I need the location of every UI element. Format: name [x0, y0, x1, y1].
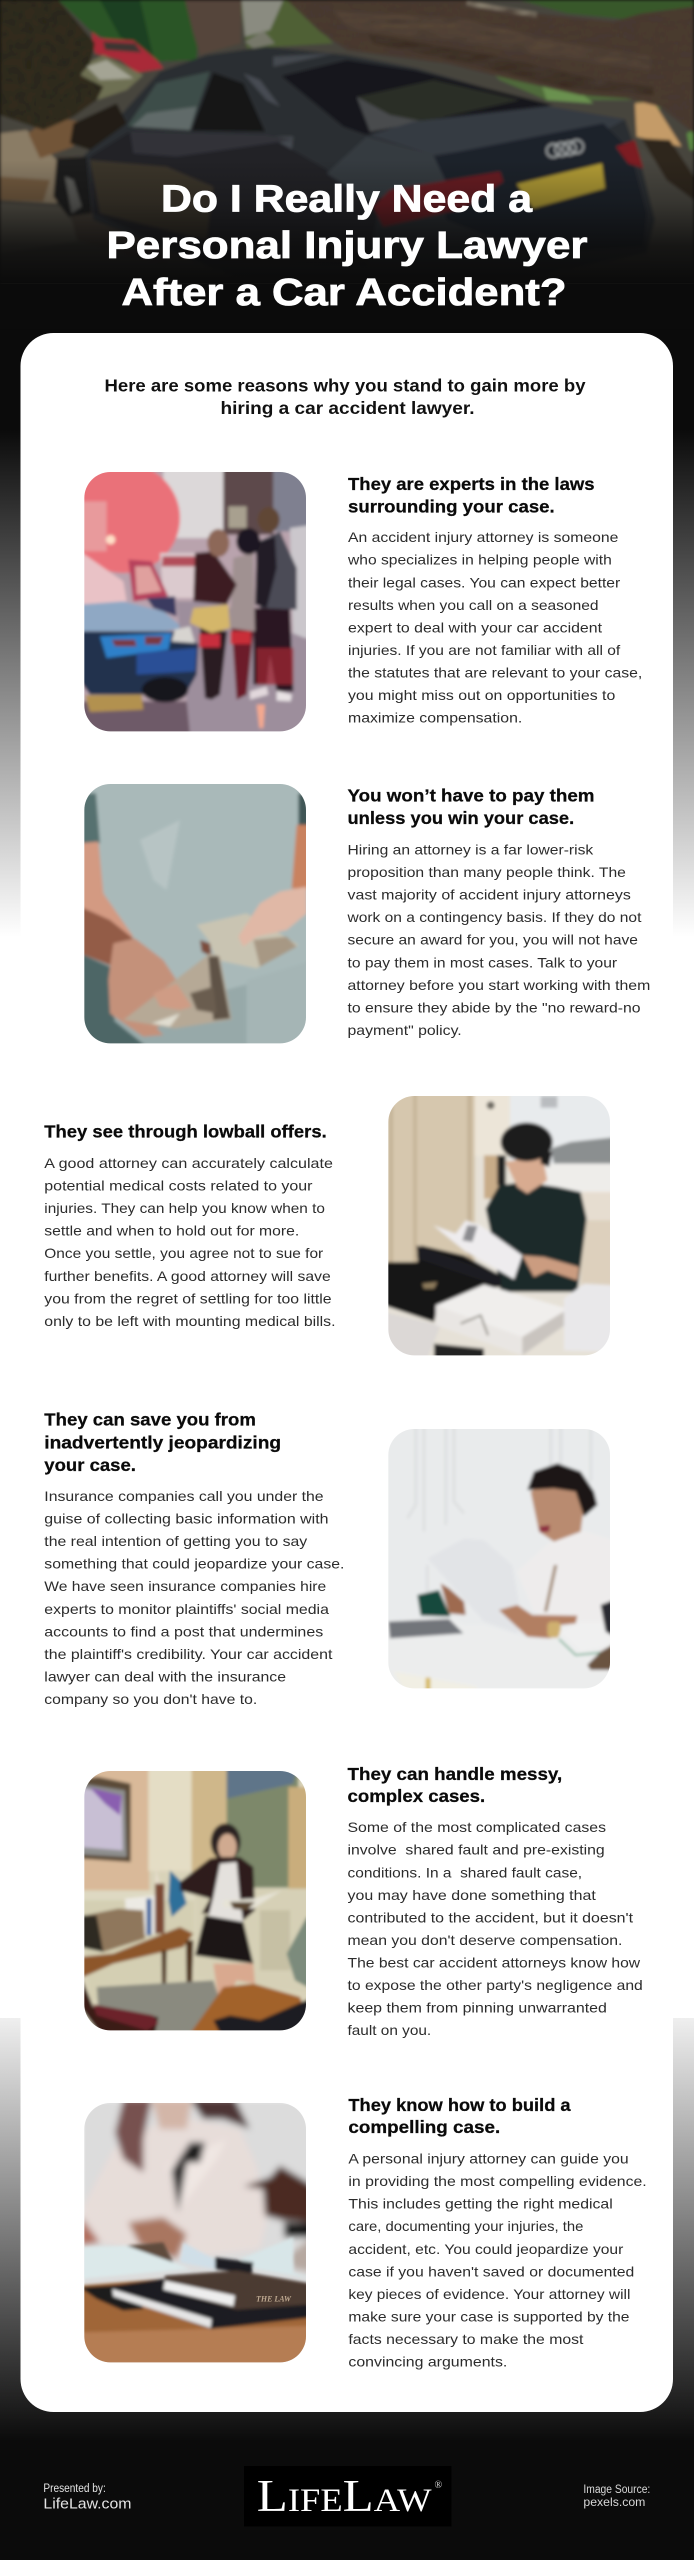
section 5 heading: complex cases.: [348, 1786, 485, 1806]
image: couple at crash scene: [84, 472, 306, 732]
red car in background: [92, 32, 163, 73]
desk with flag and books: [155, 1874, 160, 1884]
hero photo: car under fallen tree: [0, 0, 694, 284]
footer: presented by: LifeLaw.com: [43, 2496, 132, 2513]
section 5 text: mean you don't deserve compensation.: [348, 1932, 622, 1948]
intro text: hiring a car accident lawyer.: [220, 398, 474, 418]
desk items: [384, 1245, 501, 1322]
section 2 text: payment" policy.: [348, 1022, 462, 1038]
section 2 text: Hiring an attorney is a far lower-risk: [348, 842, 594, 858]
section 6 text: convincing arguments.: [348, 2354, 507, 2370]
section 5 text: involve shared fault and pre-existing: [348, 1842, 605, 1858]
title: Do I Really Need a: [161, 178, 533, 220]
section 1 text: maximize compensation.: [348, 710, 522, 726]
section 4 text: lawyer can deal with the insurance: [44, 1668, 286, 1684]
section 1 text: [347, 529, 642, 726]
section 1 text: the statutes that are relevant to your case,: [348, 665, 642, 681]
section 2 text: [346, 842, 650, 1038]
section 4 text: the real intention of getting you to say: [44, 1533, 307, 1549]
footer: image source: Image Source:: [583, 2484, 650, 2496]
white content panel: [20, 333, 673, 2412]
section 3 text: Once you settle, you agree not to sue for: [44, 1245, 324, 1261]
person left: [200, 628, 227, 700]
section 1 text: expert to deal with your car accident: [348, 619, 602, 635]
left ground: [0, 130, 57, 203]
section 4 text: guise of collecting basic information with: [44, 1511, 329, 1527]
section 6 text: facts necessary to make the most: [348, 2331, 584, 2347]
section 6 text: This includes getting the right medical: [348, 2196, 613, 2212]
section 3 text: [44, 1155, 336, 1329]
audi rings: [547, 140, 583, 157]
section 4 heading: [44, 1410, 281, 1475]
section 6 text: in providing the most compelling evidence.: [348, 2173, 647, 2189]
side windows: [127, 72, 210, 130]
title: Personal Injury Lawyer: [106, 225, 588, 267]
section 6 heading: They know how to build a: [348, 2095, 571, 2115]
front wheel: [53, 157, 92, 217]
footer: image source: pexels.com: [583, 2495, 645, 2509]
section 3 text: only to be left with mounting medical bills.: [44, 1313, 336, 1329]
boot lid and rear: [370, 107, 625, 155]
painting: [80, 1777, 131, 1862]
section 1 heading: They are experts in the laws: [348, 474, 595, 494]
section 6 heading: [348, 2095, 571, 2137]
section 4 text: Insurance companies call you under the: [44, 1488, 324, 1504]
section 6 text: A personal injury attorney can guide you: [348, 2151, 629, 2167]
section 5 text: you may have done something that: [348, 1887, 596, 1903]
section 4 text: company so you don't have to.: [44, 1691, 257, 1707]
woman: [486, 1182, 587, 1292]
section 3 text: you from the regret of settling for too little: [44, 1290, 332, 1306]
section 3 text: potential medical costs related to your: [44, 1178, 313, 1194]
number plate: [517, 163, 605, 208]
section 1 text: you might miss out on opportunities to: [348, 687, 616, 703]
section 1 heading: [348, 474, 595, 516]
section 4 heading: inadvertently jeopardizing: [44, 1432, 281, 1452]
rubble: [80, 55, 143, 100]
section 2 text: attorney before you start working with them: [348, 977, 650, 993]
image: documents and law books on desk: [80, 2099, 313, 2366]
person right: [253, 608, 293, 691]
left trunk: [0, 0, 103, 130]
image: lawyer standing in wood-panelled office: [80, 1767, 313, 2034]
document: [433, 1220, 522, 1279]
left hand and bills: [106, 938, 177, 1038]
section 4 heading: your case.: [44, 1455, 136, 1475]
section 1 text: results when you call on a seasoned: [348, 597, 598, 613]
desk: [556, 1632, 562, 1638]
section 5 text: Some of the most complicated cases: [348, 1819, 606, 1835]
section 1 heading: surrounding your case.: [348, 496, 555, 516]
section 5 text: fault on you.: [348, 2022, 431, 2038]
section 2 text: proposition than many people think. The: [348, 864, 626, 880]
section 2 heading: You won’t have to pay them: [348, 786, 594, 806]
section 3 text: settle and when to hold out for more.: [44, 1223, 299, 1239]
tail lights: [373, 172, 503, 227]
section 2 text: secure an award for you, you will not have: [348, 932, 638, 948]
section 5 text: to expose the other party's negligence and: [348, 1977, 643, 1993]
footer: presented by: [43, 2483, 132, 2513]
woman: [517, 1530, 617, 1638]
section 2 text: work on a contingency basis. If they do not: [346, 909, 642, 925]
section 1 text: their legal cases. You can expect better: [348, 574, 621, 590]
section 4 text: the plaintiff's credibility. Your car accident: [44, 1646, 333, 1662]
section 3 heading: They see through lowball offers.: [44, 1121, 327, 1141]
footer: LifeLaw logo: ®: [434, 2480, 442, 2491]
section 5 heading: They can handle messy,: [348, 1764, 562, 1784]
section 5 text: keep them from pinning unwarranted: [348, 2000, 607, 2016]
intro text: [104, 376, 586, 418]
section 3 text: injuries. They can help you know when to: [44, 1200, 325, 1216]
section 3 text: A good attorney can accurately calculate: [44, 1155, 333, 1171]
footer: image source: [583, 2484, 650, 2509]
section 5 text: conditions. In a shared fault case,: [348, 1864, 582, 1880]
image: documents and law books on desk: THE LAW: [256, 2295, 292, 2304]
image: woman at white desk: [384, 1425, 617, 1692]
intro text: Here are some reasons why you stand to gain more by: [104, 376, 586, 396]
document: [427, 1538, 519, 1633]
section 4 text: We have seen insurance companies hire: [44, 1578, 326, 1594]
title: [106, 178, 588, 314]
car body: [84, 46, 654, 238]
footer: LifeLaw logo: LIFELAW: [257, 2470, 433, 2521]
section 6 text: [348, 2151, 647, 2370]
section 6 heading: compelling case.: [348, 2117, 500, 2137]
section 3 text: further benefits. A good attorney will save: [44, 1268, 331, 1284]
image: hands holding cash: [80, 780, 313, 1047]
section 4 text: something that could jeopardize your case.: [44, 1556, 344, 1572]
footer: LifeLaw logo: [244, 2466, 452, 2526]
section 5 text: contributed to the accident, but it doesn't: [348, 1909, 633, 1925]
section 2 text: vast majority of accident injury attorneys: [348, 887, 631, 903]
section 5 text: [348, 1819, 643, 2038]
footer: presented by: Presented by:: [43, 2483, 106, 2495]
section 2 heading: unless you win your case.: [348, 808, 574, 828]
section 1 text: injuries. If you are not familiar with all of: [348, 642, 620, 658]
section 6 text: key pieces of evidence. Your attorney will: [348, 2286, 630, 2302]
section 1 text: who specializes in helping people with: [347, 552, 612, 568]
section 6 text: case if you haven't saved or documented: [348, 2263, 634, 2279]
papers: [80, 2246, 190, 2279]
right hand and bills: [197, 913, 298, 968]
section 4 text: accounts to find a post that undermines: [44, 1623, 323, 1639]
section 2 heading: [348, 786, 594, 828]
section 2 text: to ensure they abide by the "no reward-no: [348, 999, 641, 1015]
section 5 heading: [348, 1764, 562, 1806]
books: [84, 2278, 306, 2335]
foreground: [84, 1980, 160, 2030]
section 6 text: accident, etc. You could jeopardize your: [348, 2241, 624, 2257]
person middle: [232, 628, 253, 700]
section 1 text: An accident injury attorney is someone: [348, 529, 619, 545]
section 6 text: make sure your case is supported by the: [348, 2308, 630, 2324]
section 4 text: [44, 1488, 344, 1707]
section 2 text: to pay them in most cases. Talk to your: [348, 954, 617, 970]
title: After a Car Accident?: [122, 272, 566, 314]
section 6 text: care, documenting your injuries, the: [348, 2218, 584, 2234]
section 4 text: experts to monitor plaintiffs' social media: [44, 1601, 329, 1617]
section 5 text: The best car accident attorneys know how: [348, 1954, 641, 1970]
tree log on right: [287, 0, 694, 133]
rear windscreen: [282, 60, 553, 135]
section 4 heading: They can save you from: [44, 1410, 256, 1430]
image: woman reading papers by the window: [384, 1092, 617, 1359]
woman: [213, 1964, 255, 2000]
